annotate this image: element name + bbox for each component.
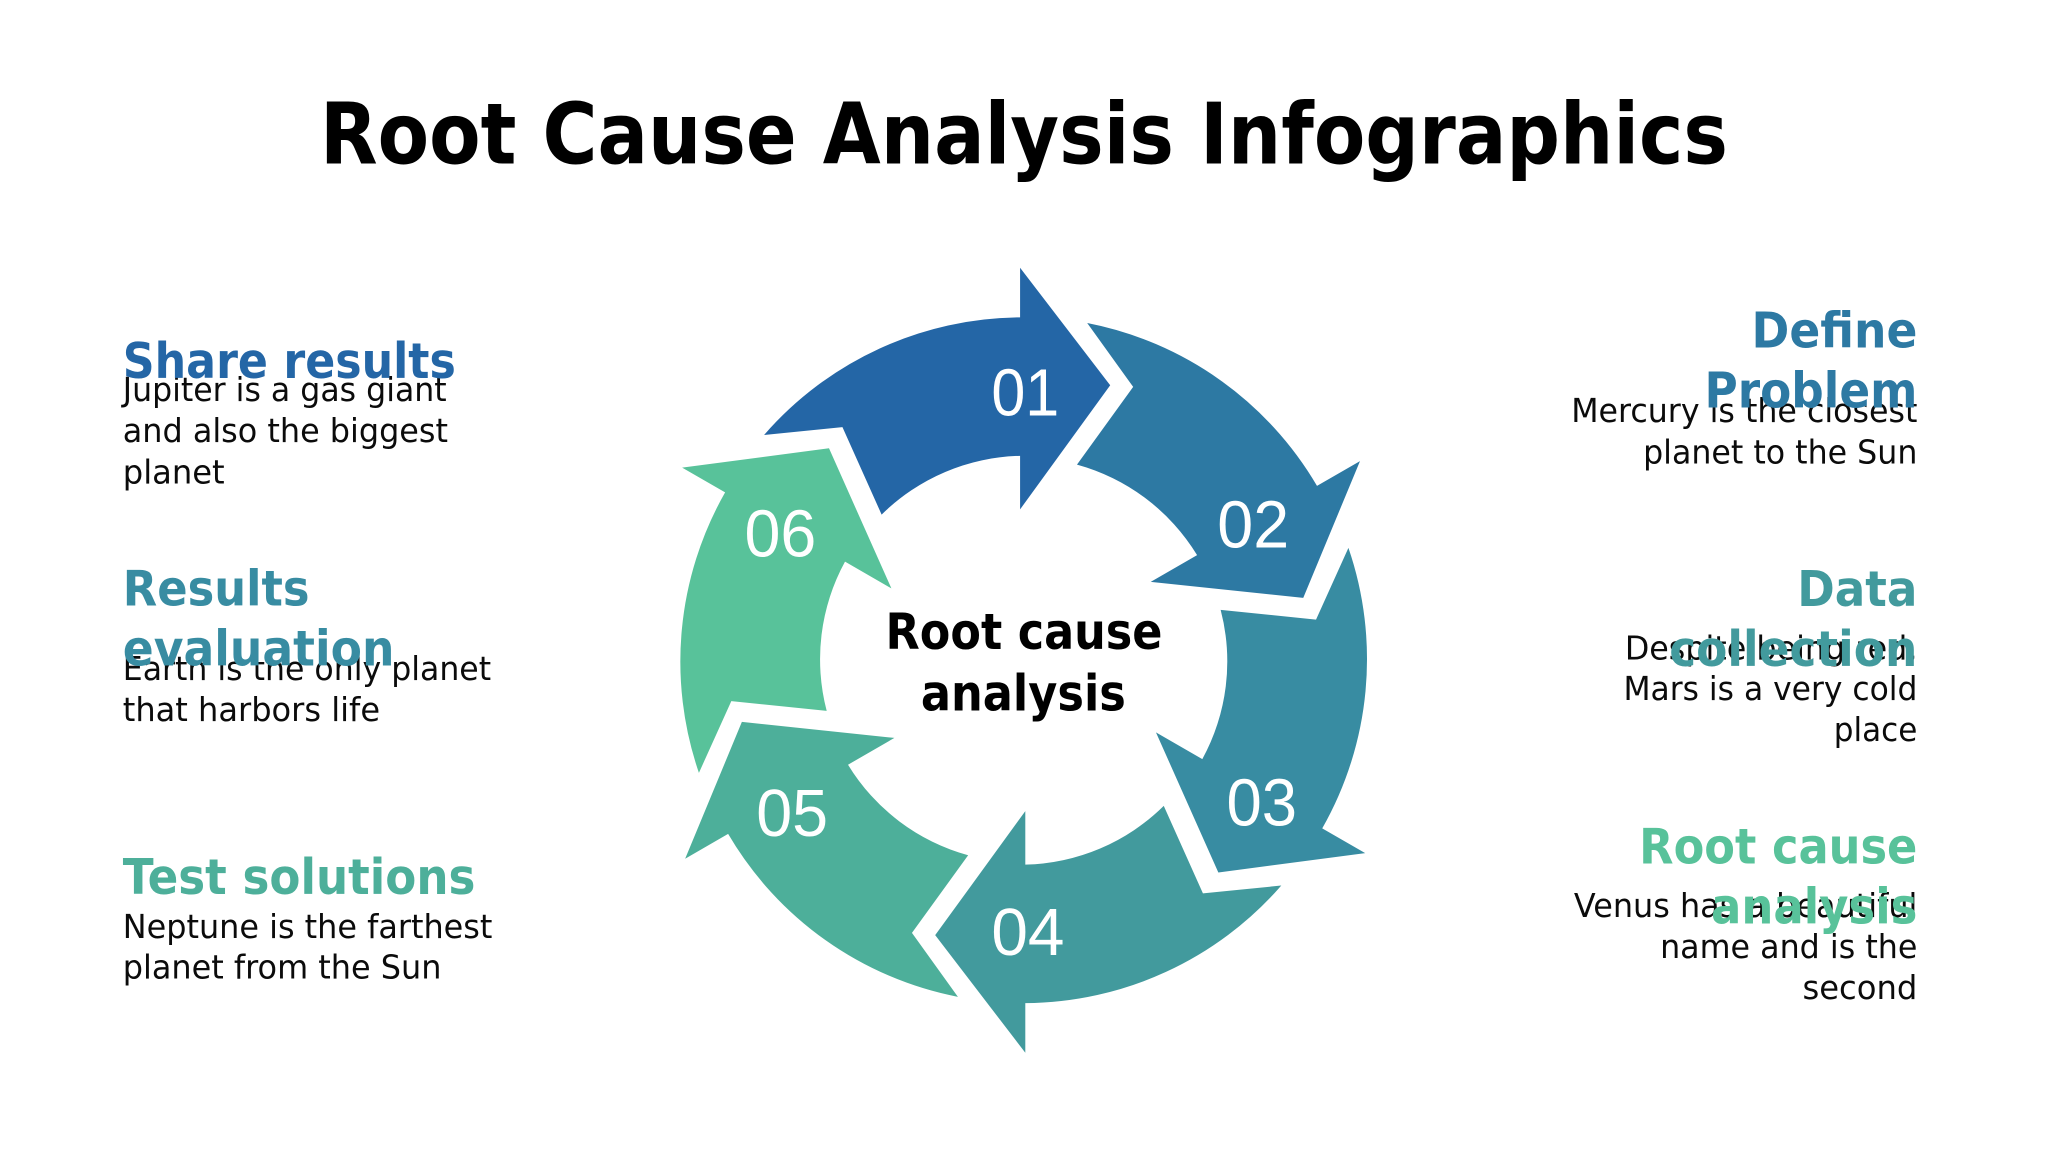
panel: share results bbox=[121, 333, 456, 491]
heading: define problem: Problem bbox=[1704, 363, 1917, 420]
heading: results evaluation: Results bbox=[123, 560, 310, 617]
heading: define problem bbox=[1704, 302, 1917, 420]
panel: test solutions bbox=[123, 849, 493, 986]
center label bbox=[886, 602, 1162, 723]
body: data collection: Despite being red, bbox=[1625, 630, 1917, 668]
body: root cause analysis: name and is the bbox=[1660, 928, 1917, 966]
body: test solutions: planet from the Sun bbox=[123, 948, 441, 986]
cycle diagram bbox=[554, 239, 1493, 1080]
heading: data collection: Data bbox=[1797, 561, 1917, 618]
heading: root cause analysis: Root cause bbox=[1639, 818, 1917, 875]
body: data collection bbox=[1624, 630, 1917, 749]
number 05: 05 bbox=[756, 777, 828, 851]
body: data collection: Mars is a very cold bbox=[1624, 670, 1917, 708]
number 04: 04 bbox=[991, 896, 1064, 970]
panel: data collection bbox=[1624, 561, 1917, 749]
arrow 04 bbox=[935, 806, 1281, 1053]
arrow 03 bbox=[1106, 508, 1493, 931]
panel: define problem bbox=[1571, 302, 1918, 472]
body: define problem: planet to the Sun bbox=[1643, 434, 1917, 472]
center label: Root cause bbox=[886, 602, 1162, 661]
body: define problem bbox=[1571, 392, 1918, 472]
number 01: 01 bbox=[991, 356, 1059, 430]
center label: analysis bbox=[921, 664, 1126, 723]
panel: results evaluation bbox=[123, 560, 491, 729]
body: share results: planet bbox=[123, 453, 225, 491]
heading: results evaluation: evaluation bbox=[123, 620, 394, 677]
body: share results bbox=[121, 371, 448, 491]
number 03: 03 bbox=[1226, 766, 1297, 840]
arrow 06 bbox=[554, 390, 941, 813]
title: Root Cause Analysis Infographics bbox=[320, 85, 1728, 184]
body: root cause analysis: Venus has a beautiful bbox=[1574, 887, 1917, 925]
heading: results evaluation bbox=[123, 560, 394, 677]
heading: define problem: Define bbox=[1752, 302, 1917, 359]
body: results evaluation bbox=[123, 650, 491, 729]
body: results evaluation: Earth is the only planet bbox=[123, 650, 491, 688]
number 06: 06 bbox=[744, 497, 816, 571]
body: test solutions: Neptune is the farthest bbox=[123, 908, 493, 946]
heading: test solutions: Test solutions bbox=[123, 849, 475, 906]
heading: share results: Share results bbox=[123, 333, 456, 390]
body: root cause analysis bbox=[1574, 887, 1917, 1007]
heading: data collection: collection bbox=[1669, 621, 1917, 678]
body: share results: and also the biggest bbox=[123, 412, 448, 450]
heading: root cause analysis bbox=[1639, 818, 1917, 935]
body: define problem: Mercury is the closest bbox=[1571, 392, 1918, 430]
panel: root cause analysis bbox=[1574, 818, 1917, 1007]
body: share results: Jupiter is a gas giant bbox=[121, 371, 447, 409]
heading: data collection bbox=[1669, 561, 1917, 678]
body: data collection: place bbox=[1834, 711, 1917, 749]
body: root cause analysis: second bbox=[1802, 969, 1917, 1007]
body: test solutions bbox=[123, 908, 493, 986]
arrow 05 bbox=[640, 657, 1027, 1080]
arrow 01 bbox=[764, 268, 1110, 515]
arrow 02 bbox=[1018, 239, 1405, 663]
number 02: 02 bbox=[1217, 488, 1289, 562]
body: results evaluation: that harbors life bbox=[123, 691, 380, 729]
heading: root cause analysis: analysis bbox=[1711, 878, 1917, 935]
